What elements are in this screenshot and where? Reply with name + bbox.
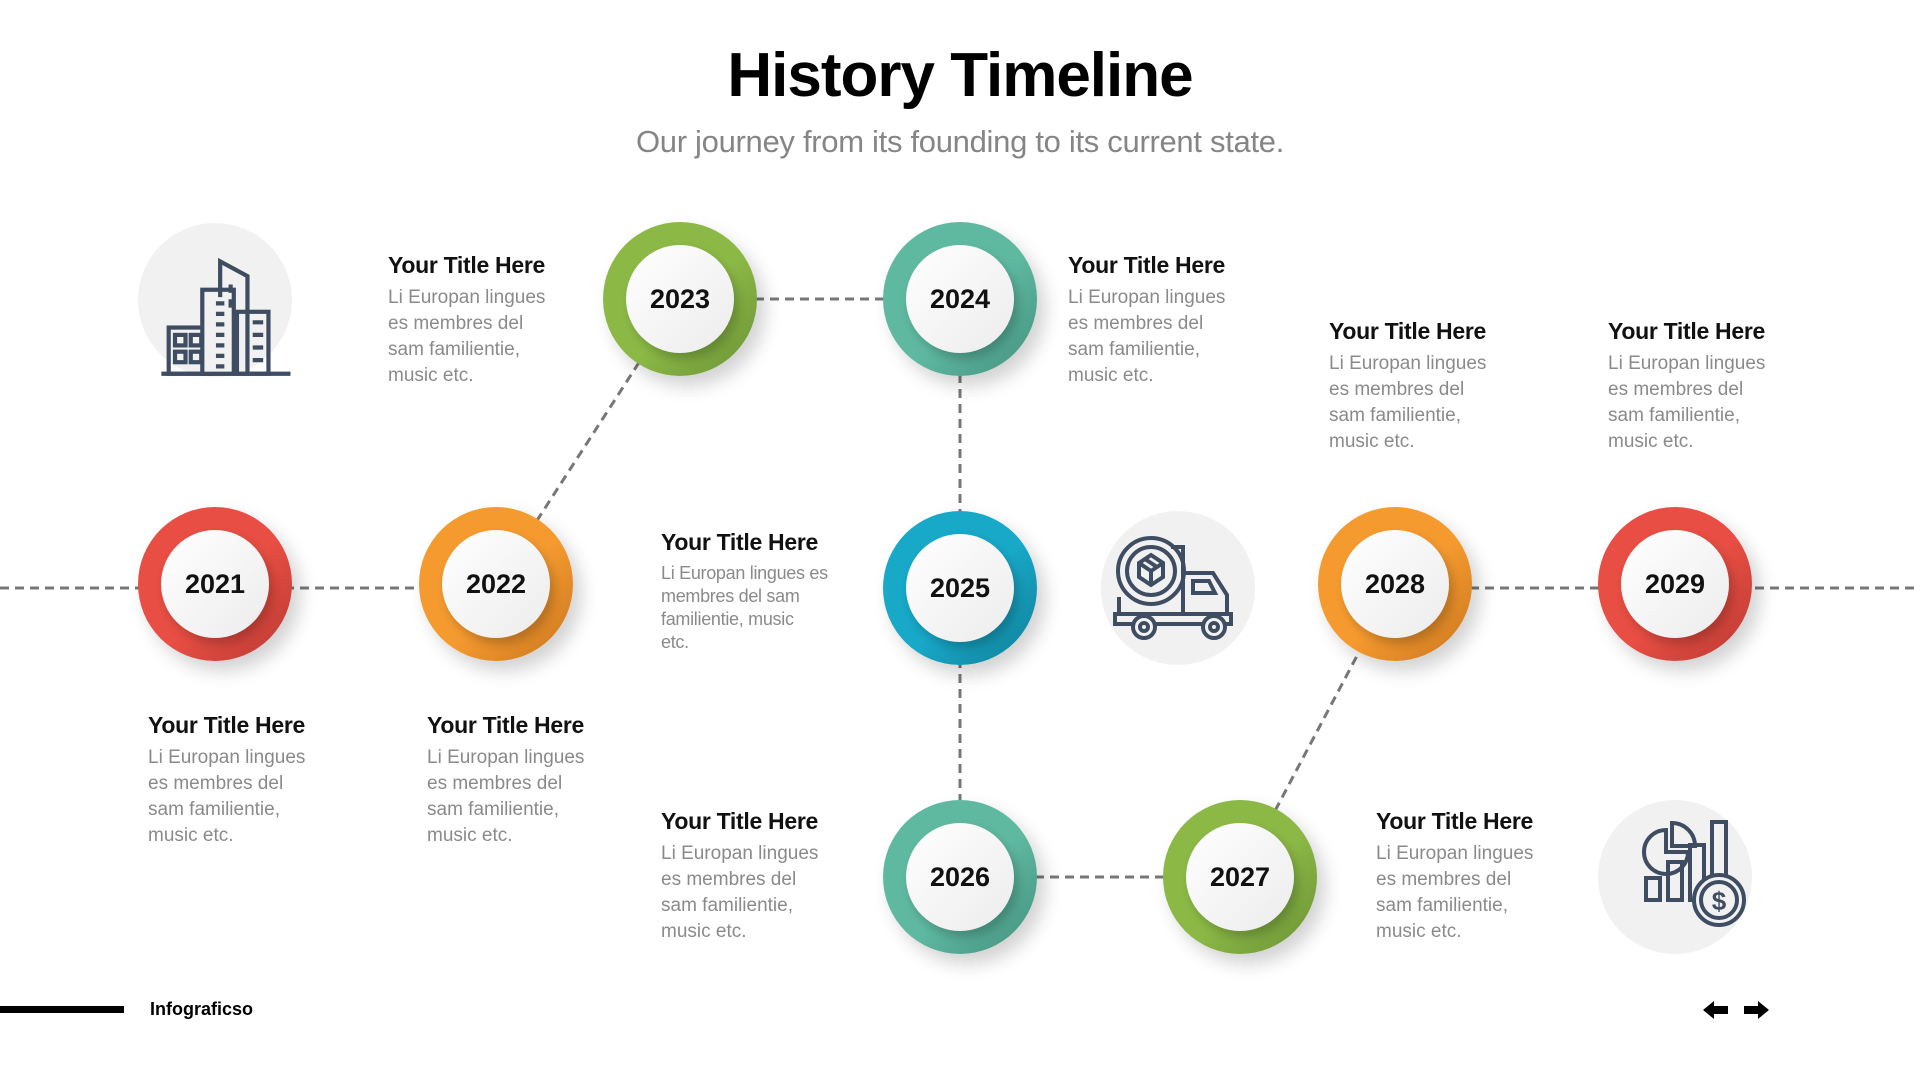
text: 2025: Your Title Here (661, 529, 818, 555)
icon: truck (1101, 511, 1255, 665)
text: 2028: es membres del (1329, 379, 1464, 400)
node 2021 (138, 507, 292, 661)
text: 2026: Your Title Here (661, 808, 818, 834)
icon: buildings (138, 223, 292, 377)
text: 2024: music etc. (1068, 365, 1154, 386)
text: 2023: music etc. (388, 365, 474, 386)
node 2027 (1163, 800, 1317, 954)
node 2028: 2028 (1365, 568, 1425, 598)
text: 2023: es membres del (388, 313, 523, 334)
node 2025 (883, 511, 1037, 665)
text: 2023: Your Title Here (388, 252, 545, 278)
title: History Timeline (727, 41, 1193, 110)
icon: finance chart (1598, 800, 1752, 954)
text: 2021: Li Europan lingues (148, 747, 305, 768)
text: 2029: es membres del (1608, 379, 1743, 400)
text: 2028: sam familientie, (1329, 405, 1461, 426)
text: 2024: Li Europan lingues (1068, 287, 1225, 308)
text: 2027 (1376, 808, 1533, 942)
text: 2021: Your Title Here (148, 712, 305, 738)
text: 2028: Your Title Here (1329, 318, 1486, 344)
footer bar (0, 1006, 124, 1013)
text: 2024: Your Title Here (1068, 252, 1225, 278)
text: 2023: sam familientie, (388, 339, 520, 360)
text: 2027: music etc. (1376, 921, 1462, 942)
text: 2025: etc. (661, 632, 689, 652)
node 2025: 2025 (930, 572, 990, 602)
text: 2026: sam familientie, (661, 895, 793, 916)
node 2029: 2029 (1645, 568, 1705, 598)
text: 2022 (427, 712, 584, 846)
text: 2023: Li Europan lingues (388, 287, 545, 308)
text: 2028 (1329, 318, 1486, 452)
node 2026: 2026 (930, 862, 990, 892)
text: 2026: music etc. (661, 921, 747, 942)
text: 2026 (661, 808, 818, 942)
text: 2021: es membres del (148, 773, 283, 794)
text: 2022: Your Title Here (427, 712, 584, 738)
text: 2025: Li Europan lingues es (661, 563, 828, 583)
text: 2026: es membres del (661, 869, 796, 890)
node 2022 (419, 507, 573, 661)
node 2022: 2022 (466, 568, 526, 598)
node 2029 (1598, 507, 1752, 661)
text: 2021: sam familientie, (148, 799, 280, 820)
text: 2024 (1068, 252, 1225, 386)
text: 2022: music etc. (427, 825, 513, 846)
node 2026 (883, 800, 1037, 954)
text: 2025: membres del sam (661, 586, 800, 606)
text: 2021: music etc. (148, 825, 234, 846)
node 2024 (883, 222, 1037, 376)
node 2028 (1318, 507, 1472, 661)
text: 2029: music etc. (1608, 431, 1694, 452)
text: 2025 (661, 529, 828, 652)
node 2023 (603, 222, 757, 376)
text: 2024: sam familientie, (1068, 339, 1200, 360)
text: 2028: Li Europan lingues (1329, 353, 1486, 374)
text: 2028: music etc. (1329, 431, 1415, 452)
text: 2022: Li Europan lingues (427, 747, 584, 768)
text: 2022: sam familientie, (427, 799, 559, 820)
icon: nav arrows (1703, 1001, 1769, 1019)
subtitle: Our journey from its founding to its current state. (636, 124, 1284, 159)
text: 2023 (388, 252, 545, 386)
text: 2024: es membres del (1068, 313, 1203, 334)
node 2023: 2023 (650, 284, 710, 314)
node 2024: 2024 (930, 284, 990, 314)
text: 2029: Your Title Here (1608, 318, 1765, 344)
text: 2027: Li Europan lingues (1376, 843, 1533, 864)
text: 2026: Li Europan lingues (661, 843, 818, 864)
text: 2027: es membres del (1376, 869, 1511, 890)
text: 2027: sam familientie, (1376, 895, 1508, 916)
icon: finance chart: $ (1712, 886, 1727, 916)
footer brand: Infograficso (150, 999, 253, 1019)
text: 2021 (148, 712, 305, 846)
text: 2027: Your Title Here (1376, 808, 1533, 834)
text: 2029: Li Europan lingues (1608, 353, 1765, 374)
node 2027: 2027 (1210, 862, 1270, 892)
text: 2022: es membres del (427, 773, 562, 794)
node 2021: 2021 (185, 568, 245, 598)
text: 2029 (1608, 318, 1765, 452)
text: 2029: sam familientie, (1608, 405, 1740, 426)
text: 2025: familientie, music (661, 609, 794, 629)
